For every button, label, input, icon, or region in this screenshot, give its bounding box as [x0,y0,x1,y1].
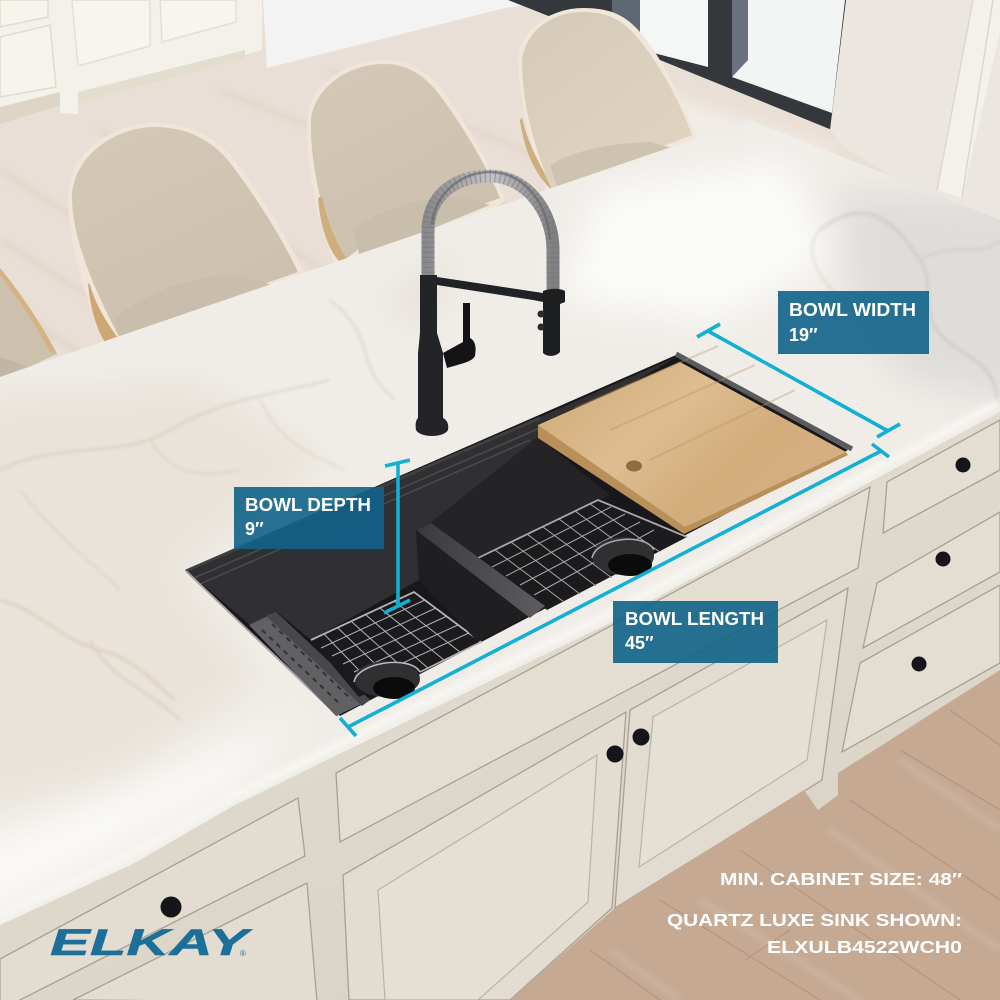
drawers right [842,420,1000,752]
dimension line: bowl width [697,324,900,437]
spring hose [428,176,553,292]
apron panel [336,487,870,842]
callout: bowl depth: BOWL DEPTH [245,495,371,515]
text: cabinet size and model [667,869,963,957]
logo: Elkay [50,922,253,963]
wood floor bottom right [510,670,1000,1000]
callout: bowl depth [234,487,384,549]
spray head [543,289,565,356]
door right [615,588,848,908]
background cabinets and wall [0,0,560,124]
left tray [249,612,370,716]
left edge [186,571,338,716]
drawers lower left [0,798,317,1000]
chair: center [307,60,506,265]
text: cabinet size and model: QUARTZ LUXE SINK SHOWN: [667,910,962,930]
dimension line: bowl depth [384,460,410,613]
chair: left [68,123,304,345]
callout: bowl depth: 9″ [245,519,264,539]
callout: bowl length: BOWL LENGTH [625,609,764,629]
callout: bowl length [613,601,778,663]
sink basin [185,355,848,716]
cutting board [538,346,848,534]
faucet [416,172,565,436]
dimension line: bowl length [340,444,889,736]
faucet body [416,275,448,436]
chair: partial far left [0,268,57,380]
cabinet base [0,400,1000,1000]
lever handle [443,303,476,368]
callout: bowl width [778,291,929,354]
text: cabinet size and model: MIN. CABINET SIZE: 48″ [720,869,963,889]
right wall [830,0,1000,240]
door left [343,712,626,1000]
callout: bowl width: 19″ [789,325,818,345]
crossbar [437,277,543,302]
top rim [676,354,852,449]
marble shading [0,160,1000,960]
knobs [160,458,970,918]
grid right [478,500,687,610]
callout: bowl width: BOWL WIDTH [789,300,916,320]
bowl divider [416,523,545,642]
right bowl wall [430,437,610,558]
logo: Elkay: ® [240,949,246,958]
chair: right [518,8,696,200]
sink [185,346,852,716]
counter front edge highlight [290,398,1000,768]
back wall [188,357,676,640]
marble veins [0,213,1000,720]
window [508,0,1000,240]
callout: bowl length: 45″ [625,633,654,653]
text: cabinet size and model: ELXULB4522WCH0 [767,937,962,957]
grid left [311,592,481,699]
logo: Elkay: ELKAY [50,922,253,963]
